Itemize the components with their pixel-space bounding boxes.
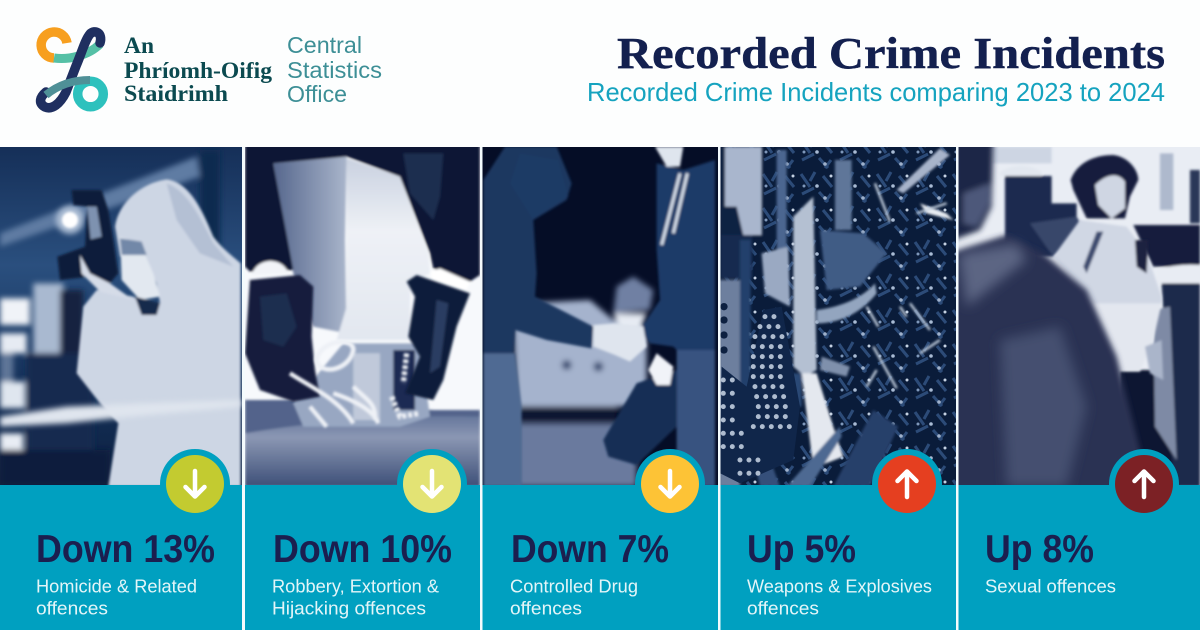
photo: forensic photographer: [0, 147, 242, 487]
logo text: Irish name: Phríomh-Oifig: [124, 58, 273, 83]
label: robbery: Robbery, Extortion &: [272, 576, 440, 596]
photo: gloved hands and pearls: [245, 140, 481, 487]
panel: teal stat band: [0, 485, 1200, 630]
panel: weapons stat: [747, 449, 942, 618]
label: weapons: [747, 576, 932, 618]
stat: Up 5%: Up 5%: [747, 528, 856, 571]
label: drugs: offences: [510, 598, 582, 618]
logo text: Irish name: Staidrimh: [124, 81, 228, 106]
label: homicide: offences: [36, 598, 108, 618]
label: homicide: Homicide & Related: [36, 576, 197, 596]
column dividers: [242, 147, 958, 630]
stat: Up 8%: Up 8%: [985, 528, 1094, 571]
photo: rifles and ammunition: [719, 147, 957, 487]
icon: CSO knot mark: [41, 32, 103, 108]
logo text: Irish name: [124, 33, 273, 106]
icon: up arrow, red: [872, 449, 942, 519]
panel: drug stat: [510, 449, 705, 618]
stat: Down 10%: Down 10%: [273, 528, 452, 571]
label: weapons: Weapons & Explosives: [747, 576, 932, 596]
ammunition belt: [720, 307, 800, 483]
icon: down arrow, lime: [160, 449, 230, 519]
panel: homicide stat: [36, 449, 230, 618]
icon: up arrow, maroon: [1109, 449, 1179, 519]
label: drugs: [510, 576, 638, 618]
logo text: Irish name: An: [124, 33, 154, 58]
logo text: English name: Central: [287, 32, 362, 58]
panel: sexual offences stat: [985, 449, 1179, 596]
header background: [0, 0, 1200, 147]
logo: Central Statistics Office: [41, 32, 382, 108]
logo text: English name: [287, 32, 382, 107]
logo text: English name: Statistics: [287, 57, 382, 83]
stat: Down 7%: Down 7%: [511, 528, 669, 571]
icon: down arrow, pale yellow: [397, 449, 467, 519]
photo: woman followed by a figure: [950, 140, 1200, 493]
subtitle: Recorded Crime Incidents comparing 2023 to 2024: [587, 77, 1165, 107]
label: robbery: Hijacking offences: [272, 598, 426, 618]
label: sexual offences: Sexual offences: [985, 576, 1116, 596]
icon: down arrow, amber: [635, 449, 705, 519]
title: Recorded Crime Incidents: [617, 29, 1165, 78]
logo text: English name: Office: [287, 81, 347, 107]
label: drugs: Controlled Drug: [510, 576, 638, 596]
label: weapons: offences: [747, 598, 819, 618]
photo: two hooded figures shaking hands: [482, 147, 719, 487]
label: homicide: [36, 576, 197, 618]
panel: robbery stat: [272, 449, 467, 618]
stat: Down 13%: Down 13%: [36, 528, 215, 571]
label: robbery: [272, 576, 440, 618]
